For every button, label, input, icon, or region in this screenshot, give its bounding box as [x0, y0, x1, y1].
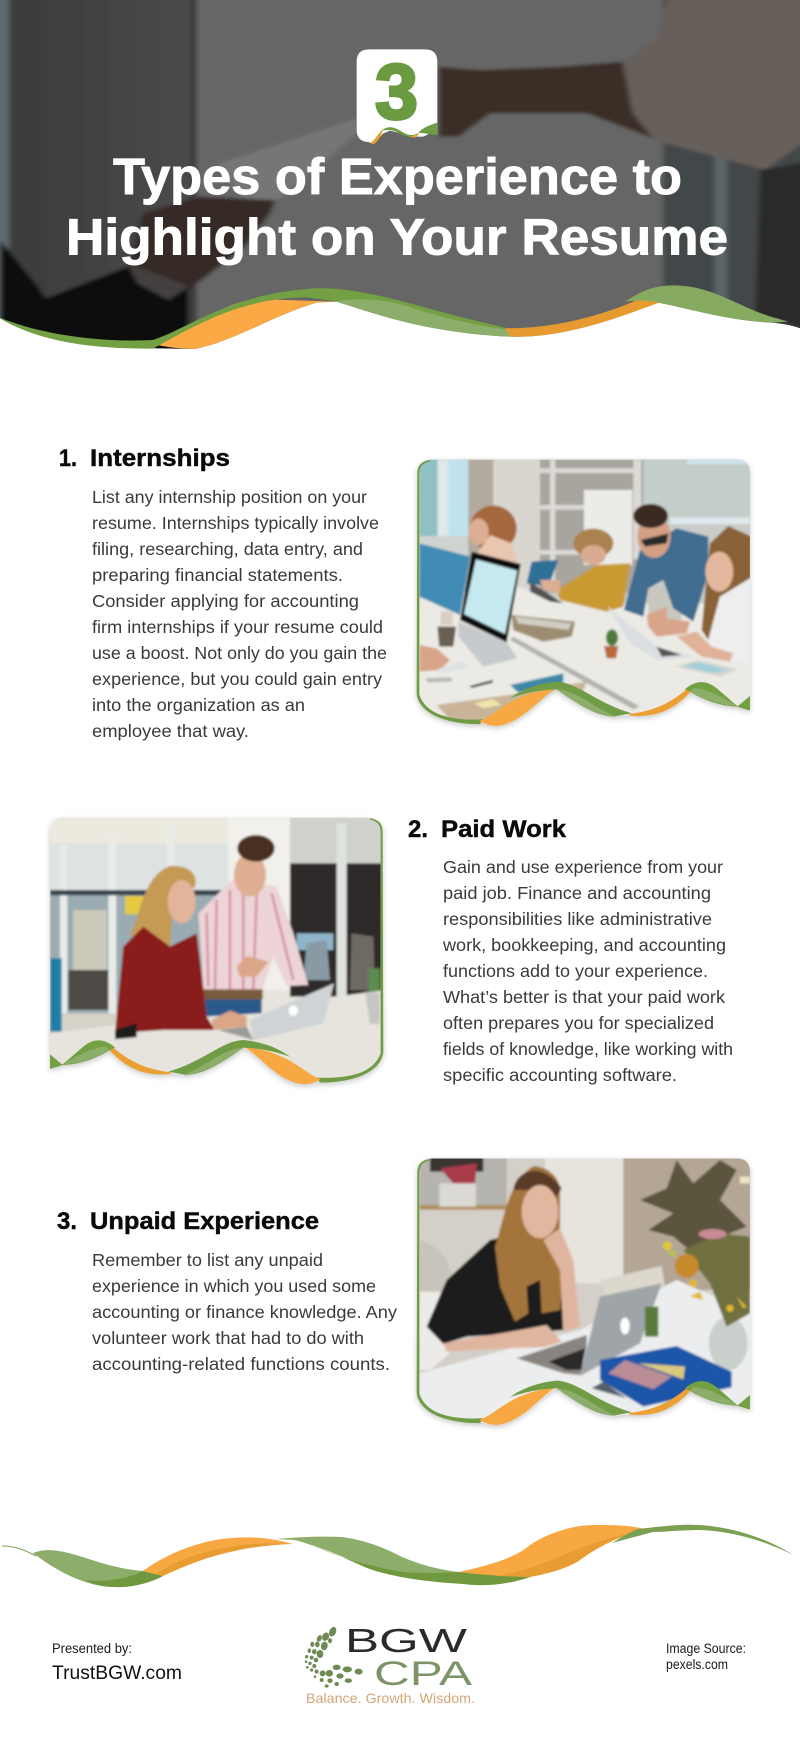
photo 2: two colleagues with a laptop [47, 813, 387, 1090]
body text: paid work: Gain and use experience from your [443, 857, 723, 877]
left woman [470, 506, 517, 551]
footer: image source: Image Source: [666, 1641, 746, 1656]
badge with number 3 [357, 48, 437, 145]
hero wave: green right [625, 285, 788, 323]
photo 2 wave [50, 818, 383, 1084]
yellow sweater person [573, 529, 613, 558]
hero wave: light green [337, 299, 514, 337]
heading: paid work: 2. [408, 816, 428, 843]
body text: internships: Consider applying for accounting [92, 591, 359, 611]
body text: internships: into the organization as an [92, 695, 305, 715]
hero wave: white base [0, 302, 800, 360]
table [419, 1280, 753, 1427]
heading: internships: Internships [90, 445, 230, 472]
woman [130, 866, 196, 947]
man in blue [648, 587, 682, 620]
body text: unpaid experience [92, 1250, 397, 1374]
woman: hair [495, 1166, 563, 1322]
orange wave 1 [143, 1537, 293, 1576]
thin lead-in stroke [2, 1546, 36, 1556]
hero wave: orange left [148, 299, 337, 349]
body text: paid work: often prepares you for specialized [443, 1013, 714, 1033]
heading: unpaid experience: 3. [57, 1208, 77, 1235]
badge shape [357, 49, 437, 145]
title [66, 148, 728, 266]
flowers [683, 1233, 750, 1327]
body text: internships: List any internship position on your [92, 487, 367, 507]
woman: black shirt [427, 1233, 563, 1344]
mug and hand [437, 627, 456, 647]
body text: paid work: work, bookkeeping, and accounting [442, 935, 726, 955]
tablet near [675, 660, 738, 677]
logo wordmark BGW: BGW [345, 1623, 468, 1660]
photo 3: woman at laptop with flowers [417, 1153, 753, 1430]
hero wave: green left [0, 288, 536, 349]
BGW CPA logo [305, 1623, 475, 1706]
footer: presented by [52, 1641, 182, 1684]
body text: paid work: paid job. Finance and accounting [443, 883, 711, 903]
section 1: internships text [59, 445, 387, 741]
photo 3 wave [417, 1159, 750, 1425]
title: Highlight on Your Resume [66, 208, 728, 266]
body text: unpaid experience: accounting or finance knowledge. Any [92, 1302, 397, 1322]
man [198, 878, 308, 993]
body text: internships: use a boost. Not only do you gain the [92, 643, 387, 663]
footer: image source: pexels.com [666, 1657, 728, 1672]
section 3: unpaid experience text [57, 1208, 397, 1374]
hero wave: orange right [505, 298, 659, 337]
wire basket [512, 615, 575, 642]
photo 1 wave [417, 460, 750, 726]
logo wordmark CPA: CPA [374, 1655, 472, 1693]
body text: paid work: functions add to your experience. [443, 961, 708, 981]
body text: internships: preparing financial statements. [92, 565, 343, 585]
blue folder and papers [600, 1346, 732, 1407]
website: TrustBGW.com [52, 1663, 182, 1684]
green wave 2 [275, 1537, 530, 1585]
body text: unpaid experience: experience in which you used some [92, 1276, 376, 1296]
hero banner photo with wave [0, 0, 800, 373]
body text: unpaid experience: accounting-related functions counts. [92, 1354, 390, 1374]
logo dots [305, 1626, 363, 1688]
laptop [607, 606, 693, 661]
body text: internships: filing, researching, data entry, and [92, 539, 363, 559]
laptop [250, 983, 334, 1040]
hero photo: handing over a resume [0, 0, 800, 373]
presented by label: Presented by: [52, 1641, 132, 1656]
photo 1: team at office desk [417, 457, 753, 730]
tablet far [527, 560, 558, 587]
heading: unpaid experience: Unpaid Experience [90, 1208, 319, 1235]
small stationery [425, 677, 452, 683]
body text: paid work: What’s better is that your paid work [443, 987, 725, 1007]
body text: internships: firm internships if your resume could [92, 617, 383, 637]
logo tagline: Balance. Growth. Wisdom. [306, 1690, 475, 1706]
green wave 3 [612, 1525, 793, 1555]
body text: paid work: specific accounting software. [443, 1065, 677, 1085]
body text: paid work: responsibilities like administrative [443, 909, 712, 929]
footer wave [2, 1525, 793, 1587]
title: Types of Experience to [113, 148, 682, 205]
body text: internships: resume. Internships typically involve [92, 513, 379, 533]
body text: internships: experience, but you could gain entry [92, 669, 382, 689]
body text: unpaid experience: Remember to list any unpaid [92, 1250, 323, 1270]
orange wave 2 [459, 1525, 648, 1577]
body text: paid work: fields of knowledge, like working with [443, 1039, 733, 1059]
monitor [460, 552, 521, 642]
footer: image source [666, 1641, 746, 1672]
body text: paid work [442, 857, 733, 1085]
plant [640, 1160, 747, 1253]
laptop [517, 1335, 587, 1375]
body text: internships [92, 487, 387, 741]
chair [419, 1240, 452, 1293]
cactus [604, 646, 618, 658]
heading: paid work: Paid Work [441, 816, 566, 843]
body text: unpaid experience: volunteer work that had to do with [92, 1328, 364, 1348]
section 2: paid work text [408, 816, 733, 1085]
green wave 1 [33, 1550, 163, 1587]
body text: internships: employee that way. [92, 721, 249, 741]
heading: internships: 1. [59, 445, 77, 472]
vase [709, 1317, 748, 1370]
right woman [702, 526, 752, 640]
numeral 3: 3 [375, 48, 418, 136]
